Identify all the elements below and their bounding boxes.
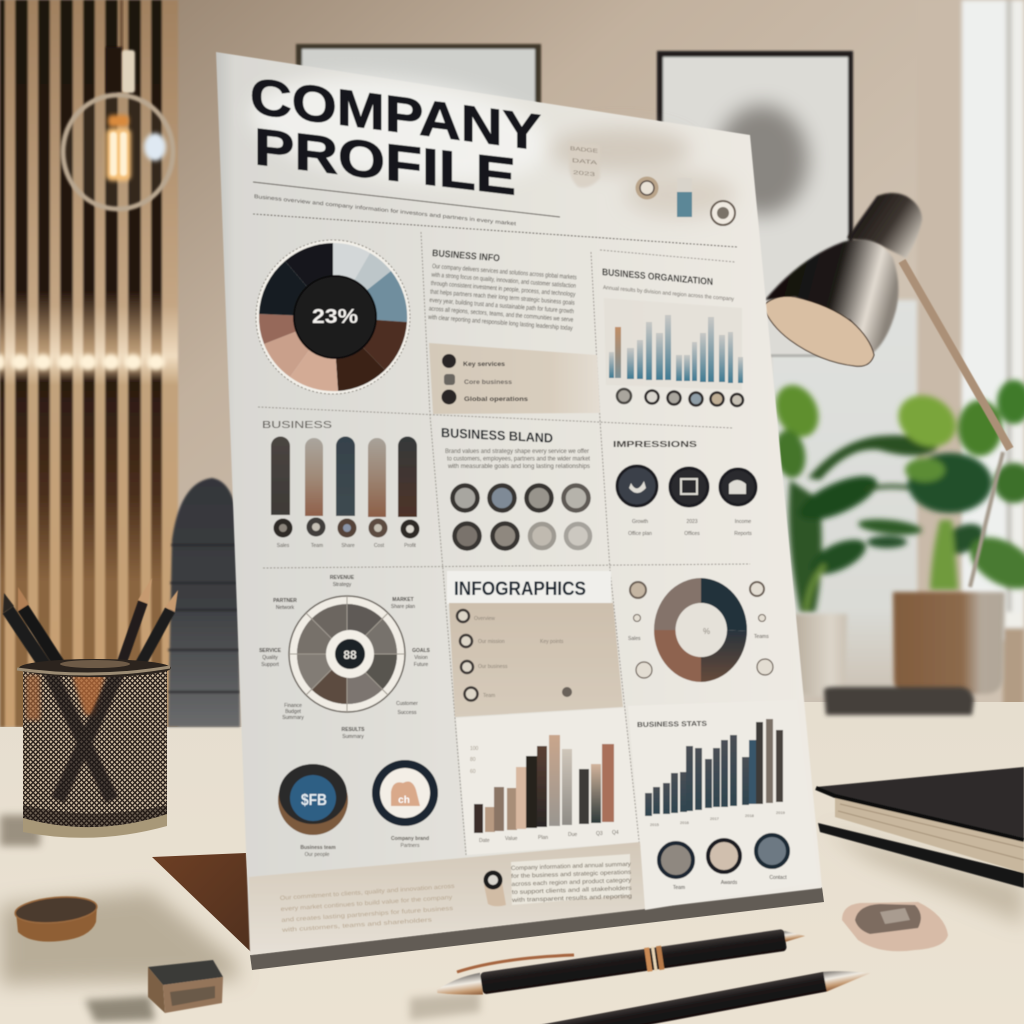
bottom band panel xyxy=(249,842,645,955)
panel: blue bar chart xyxy=(602,267,743,406)
pill labels: Profit xyxy=(404,543,416,549)
bottom icon xyxy=(484,876,506,906)
axis labels: 2019 xyxy=(776,810,786,815)
donut side icons xyxy=(630,582,773,678)
pale wall behind plants xyxy=(770,300,917,710)
picture frame left xyxy=(296,44,541,111)
labels: Growth xyxy=(632,519,648,525)
desk shadows xyxy=(0,815,1024,1022)
labels: 2023 xyxy=(686,519,698,525)
icon labels: Team xyxy=(673,885,685,891)
pen two xyxy=(538,963,872,1024)
radial labels: Summary xyxy=(282,715,304,721)
donut hole xyxy=(676,603,726,657)
radial labels: MARKET xyxy=(392,597,414,603)
panel: three round icons xyxy=(613,439,756,537)
radial spokes xyxy=(289,596,405,712)
window xyxy=(917,0,1024,708)
x labels: Q3 xyxy=(596,831,603,837)
bars xyxy=(474,735,614,833)
panel: radial diagram xyxy=(259,575,431,740)
bottom body text left: every market continues to build value for the company xyxy=(280,895,452,913)
bottom right icons xyxy=(659,835,788,891)
brown folder behind poster xyxy=(152,853,252,953)
radial labels: Network xyxy=(276,605,295,611)
round icons xyxy=(617,466,756,506)
x labels: Value xyxy=(505,836,518,842)
list item labels xyxy=(463,362,529,403)
body text: Our company delivers services and solutions across global markets xyxy=(432,263,577,281)
list item labels: Core business xyxy=(464,380,513,386)
labels: Income xyxy=(735,519,751,525)
pencil holder xyxy=(3,578,178,838)
coin xyxy=(14,894,98,942)
radial labels: SERVICE xyxy=(259,648,282,654)
mesh cup xyxy=(23,670,167,832)
axis labels: 2015 xyxy=(650,822,660,827)
labels xyxy=(628,519,752,537)
body text: Brand values and strategy shape every service we offer xyxy=(445,449,589,455)
chart background xyxy=(604,298,742,390)
header badge: DATA xyxy=(572,158,598,167)
pill labels: Sales xyxy=(277,543,290,549)
slat glow lights xyxy=(0,354,165,370)
heading band xyxy=(447,571,611,604)
labels: Offices xyxy=(684,531,700,537)
cup rim xyxy=(17,659,171,677)
body text: with measurable goals and long lasting relationships xyxy=(447,464,590,470)
beige panel xyxy=(449,603,623,717)
glass paperweight xyxy=(842,902,948,951)
body text: through consistent investment in people, process, and technology xyxy=(430,280,576,298)
bottom band panel: across each region and product category xyxy=(511,878,632,888)
radial labels: Share plan xyxy=(391,604,415,610)
plants xyxy=(767,378,1024,612)
radial labels xyxy=(259,575,431,740)
panel: circular logos: $FB xyxy=(301,792,327,809)
icon labels: Awards xyxy=(721,880,738,886)
subheading: Annual results by division and region across the company xyxy=(603,285,734,303)
title xyxy=(250,67,541,207)
axis labels: 2016 xyxy=(680,820,690,825)
axis labels: 2017 xyxy=(710,816,720,821)
logo labels: Our people xyxy=(305,852,330,858)
title highlight xyxy=(245,62,555,198)
bottom band panel: Company information and annual summary xyxy=(511,862,631,872)
panel: pill chart xyxy=(262,420,420,549)
heading: BUSINESS INFO xyxy=(432,248,500,264)
office chair xyxy=(168,478,240,727)
icon glyphs xyxy=(629,479,746,494)
radial labels: Customer xyxy=(396,701,418,707)
heading: INFOGRAPHICS xyxy=(454,579,586,600)
pill icons xyxy=(274,518,420,538)
bottom band panel: for the business and strategic operations xyxy=(511,870,631,880)
donut labels xyxy=(628,634,769,642)
radial segments xyxy=(297,604,397,704)
body text: across all regions, sectors, teams, and the communities we serve xyxy=(428,305,574,324)
axis labels: 100 xyxy=(470,746,479,752)
pen one xyxy=(435,925,807,1002)
pencils xyxy=(3,578,178,670)
small list dot xyxy=(562,687,572,697)
cup bottom shading xyxy=(23,805,167,832)
x labels: Due xyxy=(568,832,577,838)
list labels: Overview xyxy=(474,616,495,622)
desk lamp xyxy=(763,193,1010,587)
centre label: 88 xyxy=(343,648,357,662)
terracotta plant pot xyxy=(893,592,1005,694)
header badge xyxy=(569,141,600,188)
donut labels: Sales xyxy=(628,636,641,642)
panel: text block xyxy=(427,248,579,332)
bars xyxy=(609,315,743,383)
list labels: Team xyxy=(483,693,495,699)
radial labels: Quality xyxy=(262,655,278,661)
small cube xyxy=(148,960,223,1013)
radial labels: RESULTS xyxy=(342,727,365,733)
panel: business brand xyxy=(441,425,590,548)
blurred tray xyxy=(824,687,974,715)
axis labels xyxy=(650,810,786,827)
donut labels: Teams xyxy=(754,634,769,640)
radial labels: Finance xyxy=(284,703,302,709)
list icons xyxy=(457,610,478,700)
radial labels: Support xyxy=(261,662,279,668)
body text: with clear reporting and responsible long lasting leadership today xyxy=(427,314,574,332)
icon labels xyxy=(673,875,787,891)
radial labels: Strategy xyxy=(333,582,352,588)
bottom band panel: to support clients and all stakeholders xyxy=(512,886,632,896)
panel: donut chart xyxy=(628,578,773,682)
pill labels: Share xyxy=(341,543,355,549)
x labels: Date xyxy=(479,838,490,844)
crossed pencils inside xyxy=(50,672,118,800)
x labels: Q4 xyxy=(612,830,619,836)
panel: circular logos xyxy=(278,760,438,858)
bottom body text left: and creates lasting partnerships for future business xyxy=(281,906,453,924)
axis labels: 60 xyxy=(470,769,476,775)
body text: every year, building trust and a sustainable path for future growth xyxy=(429,297,575,315)
subtitle lines: Business overview and company information for investors and partners in every market xyxy=(254,194,517,228)
heading: BUSINESS BLAND xyxy=(441,425,553,446)
logo labels: Company brand xyxy=(391,836,429,842)
pendant lamp xyxy=(63,0,173,209)
list labels xyxy=(474,616,564,699)
poster band base xyxy=(250,887,824,970)
pie slices xyxy=(259,243,407,391)
icon labels: Contact xyxy=(769,875,787,881)
bottom body text left xyxy=(278,884,457,934)
list item icons xyxy=(442,354,456,404)
panel: dark bar chart xyxy=(637,719,786,827)
cup base xyxy=(23,814,167,838)
panel: multicolour bar chart xyxy=(470,735,619,844)
panel: pie chart xyxy=(256,240,410,394)
picture frame right xyxy=(657,51,853,356)
list labels: Our mission xyxy=(478,639,505,645)
title: COMPANY xyxy=(250,67,541,161)
list labels: Key points xyxy=(540,639,564,645)
title: PROFILE xyxy=(254,118,516,207)
bars xyxy=(645,719,783,816)
icon grid xyxy=(452,486,590,548)
labels: Reports xyxy=(734,531,752,537)
copper reflections xyxy=(26,675,105,720)
labels: Office plan xyxy=(628,531,652,537)
heading: BUSINESS xyxy=(262,420,332,431)
book xyxy=(816,767,1024,888)
radial labels: Budget xyxy=(285,709,302,715)
radial labels: Summary xyxy=(342,734,364,740)
radial labels: GOALS xyxy=(412,648,431,654)
header small bar xyxy=(677,178,692,217)
axis labels: 2018 xyxy=(745,813,755,818)
panel: circular logos: ch xyxy=(398,795,410,806)
x labels xyxy=(479,830,619,844)
header badge: BADGE xyxy=(570,146,598,155)
heading: BUSINESS ORGANIZATION xyxy=(602,267,713,288)
chart icons xyxy=(617,389,743,406)
list item labels: Key services xyxy=(463,362,506,368)
list item labels: Global operations xyxy=(464,397,529,403)
bottom band panel: with transparent results and reporting xyxy=(511,894,632,904)
body text: with a strong focus on quality, innovation, and customer satisfaction xyxy=(430,271,577,290)
pill labels: Team xyxy=(311,543,323,549)
body text xyxy=(445,449,590,470)
background wall xyxy=(0,0,1024,740)
header icon circle xyxy=(636,176,658,200)
pill labels: Cost xyxy=(374,543,385,549)
lower panel backgrounds xyxy=(456,700,818,910)
panel: donut chart: % xyxy=(703,627,710,636)
desk surface xyxy=(0,702,1024,1024)
heading: BUSINESS STATS xyxy=(637,721,707,729)
logo labels: Business team xyxy=(300,845,336,851)
bottom body text left: with customers, teams and shareholders xyxy=(281,917,432,934)
pie centre value: 23% xyxy=(312,306,358,328)
pill labels xyxy=(277,543,416,549)
radial labels: Vision xyxy=(414,655,428,661)
body text: to customers, employees, partners and the wider market xyxy=(447,456,590,462)
x labels: Plan xyxy=(538,835,548,841)
radial labels: PARTNER xyxy=(273,598,297,604)
radial labels: Success xyxy=(398,710,417,716)
panel: infographics xyxy=(447,571,623,717)
bottom body text right xyxy=(511,854,630,905)
radial labels: Future xyxy=(414,662,428,668)
logo labels xyxy=(300,836,429,858)
axis labels xyxy=(470,746,479,775)
logo labels: Partners xyxy=(401,843,420,849)
panel dividers xyxy=(258,232,750,855)
subtitle lines xyxy=(253,182,737,247)
white plant pot xyxy=(793,614,847,696)
bottom body text left: Our commitment to clients, quality and innovation across xyxy=(280,884,455,902)
pill bars xyxy=(271,436,417,517)
heading: IMPRESSIONS xyxy=(613,439,697,449)
list labels: Our business xyxy=(478,664,508,670)
poster sheet xyxy=(216,52,822,955)
body text: that helps partners reach their long term strategic business goals xyxy=(430,288,575,307)
panel: beige list xyxy=(429,343,600,414)
axis labels: 80 xyxy=(470,757,476,763)
radial labels: REVENUE xyxy=(330,575,355,581)
beige smudge xyxy=(550,128,735,217)
header badge: 2023 xyxy=(573,170,595,178)
wooden slat wall xyxy=(0,0,178,727)
body text xyxy=(427,263,578,332)
header icon ring xyxy=(711,201,735,225)
